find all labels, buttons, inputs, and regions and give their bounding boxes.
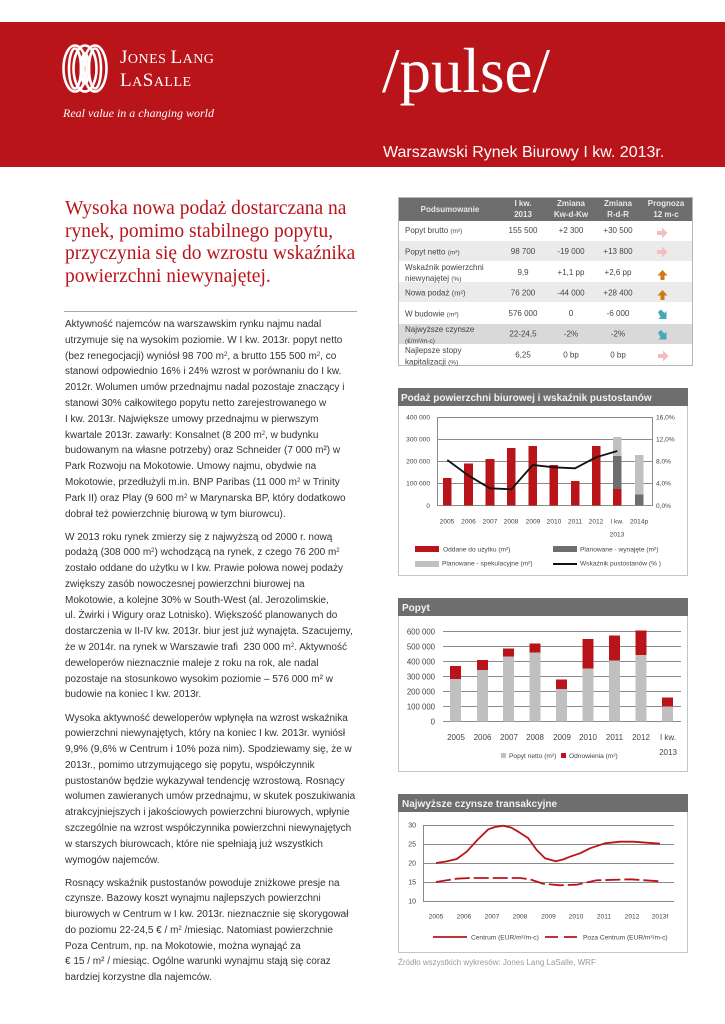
icon: Jones Lang LaSalle logo rings bbox=[62, 44, 108, 93]
x axis labels: I kw. bbox=[660, 733, 676, 742]
x axis labels: 2005 bbox=[447, 733, 465, 742]
tagline: Real value in a changing world bbox=[63, 106, 214, 120]
right axis labels: 8,0% bbox=[656, 458, 671, 466]
main heading: rynek, pomimo stabilnego popytu, bbox=[65, 221, 333, 242]
logo wordmark bbox=[120, 47, 214, 90]
y axis labels: 20 bbox=[408, 860, 416, 868]
x axis labels: 2014p bbox=[630, 518, 648, 526]
chart legend: Wskaźnik pustostanów (% ) bbox=[580, 560, 661, 568]
table values: 76 200 bbox=[511, 288, 536, 298]
report subtitle: Warszawski Rynek Biurowy I kw. 2013r. bbox=[383, 144, 664, 161]
x axis labels: I kw. bbox=[610, 518, 624, 526]
x axis labels: 2013 bbox=[610, 532, 625, 538]
text block: rents: Poza Centrum, np. na Mokotowie, można wynająć za bbox=[65, 941, 301, 952]
text block: vacancy: powierzchni niewynajętych, który na koniec I kw. 2013r. wyniósł bbox=[65, 728, 345, 739]
table header: Podsumowanie bbox=[421, 205, 480, 214]
main heading: powierzchni niewynajętej. bbox=[65, 266, 271, 287]
chart legend: Planowane - wynajęte (m²) bbox=[580, 546, 658, 554]
bar chart: renewals bbox=[450, 630, 673, 706]
x axis labels: 2009 bbox=[541, 914, 556, 920]
text block: new supply: budowie na koniec I kw. 2013r. bbox=[65, 689, 201, 700]
left axis labels bbox=[406, 414, 430, 510]
x axis labels: 2013 bbox=[659, 748, 677, 757]
x axis labels: 2005 bbox=[440, 518, 455, 526]
text block: new supply: W 2013 roku rynek zmierzy się z najwyższą od 2000 r. nową bbox=[65, 532, 332, 542]
text block: new supply: zostało oddane do użytku w I kw. Prawie połowa nowej podaży bbox=[65, 563, 343, 574]
text block: rents: do poziomu 22-24,5 € / m2 /miesiąc. Natomiast powierzchnie bbox=[65, 925, 333, 936]
y axis labels: 200 000 bbox=[407, 688, 436, 696]
text block: tenant activity: kwartale 2013r. zawarły: Konsalnet (8 200 m2, w budynku bbox=[65, 430, 318, 441]
text block: rents bbox=[65, 878, 348, 983]
text block: vacancy: w starszych biurowcach, które nie spełniają już wszystkich bbox=[65, 839, 323, 850]
text block: new supply: zwiększy zasób nowoczesnej powierzchni biurowej na bbox=[65, 579, 305, 590]
table values: 0 bp bbox=[610, 350, 626, 360]
source note: Źródło wszystkich wykresów: Jones Lang LaSalle, WRF bbox=[398, 958, 596, 967]
chart legend bbox=[433, 934, 668, 942]
right axis labels: 12,0% bbox=[656, 436, 675, 444]
text block: tenant activity bbox=[65, 319, 346, 520]
x axis labels: 2010 bbox=[569, 914, 584, 920]
text block: new supply: że w 2014r. na rynek w Warszawie trafi 230 000 m2. Aktywność bbox=[65, 642, 347, 653]
table row labels: niewynajętej (%) bbox=[405, 274, 461, 283]
text block: vacancy: szczególnie na wzrost współczynnika powierzchni niewynajętych bbox=[65, 823, 351, 834]
table row labels: (€/m²/m-c) bbox=[405, 338, 435, 345]
text block: vacancy: wolumen zawieranych umów przednajmu, w skutek poszukiwania bbox=[65, 791, 355, 802]
line chart: vacancy rate bbox=[447, 451, 617, 489]
table values: +30 500 bbox=[603, 226, 633, 235]
text block: new supply: pozostaje na stosunkowo wysokim poziomie – 576 000 m² w bbox=[65, 674, 333, 685]
table values bbox=[509, 226, 633, 360]
left axis labels: 300 000 bbox=[406, 436, 430, 444]
x axis labels: 2012 bbox=[632, 733, 650, 742]
y axis labels: 100 000 bbox=[407, 702, 436, 712]
text block: rents: biurowych w Centrum w I kw. 2013r. nieznacznie się skorygował bbox=[65, 909, 348, 920]
panel: top rents chart bbox=[398, 794, 688, 953]
text block: tenant activity: stanowi 30% całkowitego popytu netto zarejestrowanego w bbox=[65, 398, 326, 409]
x axis labels: 2012 bbox=[625, 914, 640, 920]
text block: rents: € 15 / m² / miesiąc. Ogólne warunki wynajmu stają się coraz bbox=[65, 956, 331, 967]
table header bbox=[421, 199, 685, 219]
table values: 0 bbox=[569, 309, 574, 318]
chart legend: Odnowienia (m²) bbox=[569, 753, 618, 760]
x axis labels: 2009 bbox=[526, 518, 541, 526]
left axis labels: 400 000 bbox=[406, 414, 430, 422]
table values: -2% bbox=[611, 330, 625, 338]
icon: forecast arrows bbox=[657, 228, 668, 362]
chart legend: Poza Centrum (EUR/m²/m-c) bbox=[583, 934, 668, 942]
text block: tenant activity: (bez renegocjacji) wyniósł 98 700 m2, a brutto 155 500 m2, co bbox=[65, 351, 336, 362]
text block: new supply: deweloperów nieznacznie maleje z roku na rok, ale nadal bbox=[65, 658, 318, 669]
table header: I kw. bbox=[514, 199, 532, 208]
table row labels: Popyt netto (m²) bbox=[405, 248, 460, 256]
text block: vacancy: wymogów najemców. bbox=[65, 855, 159, 866]
text block: tenant activity: I kw. 2013r. Największe umowy przednajmu w pierwszym bbox=[65, 414, 318, 425]
table header: Zmiana bbox=[557, 199, 586, 208]
right axis labels: 0,0% bbox=[656, 503, 671, 510]
panel: supply and vacancy chart bbox=[398, 388, 688, 576]
right axis labels: 16,0% bbox=[656, 414, 675, 422]
left axis labels: 200 000 bbox=[406, 458, 430, 466]
x axis labels bbox=[447, 733, 677, 757]
table values: +2,6 pp bbox=[605, 268, 632, 277]
x axis labels: 2011 bbox=[568, 518, 582, 526]
x axis labels bbox=[429, 914, 668, 920]
left axis labels: 100 000 bbox=[406, 480, 430, 488]
table row labels: Nowa podaż (m²) bbox=[405, 288, 466, 298]
y axis labels: 10 bbox=[408, 898, 416, 906]
y axis labels: 0 bbox=[431, 718, 436, 726]
table values: 576 000 bbox=[509, 309, 538, 318]
text block: vacancy: pustostanów będzie wykazywał tendencję wzrostową. Rosnący bbox=[65, 776, 345, 787]
x axis labels: 2010 bbox=[547, 518, 562, 526]
text block: tenant activity: utrzymuje się na wysokim poziomie. W I kw. 2013r. popyt netto bbox=[65, 335, 342, 346]
y axis labels: 15 bbox=[408, 880, 416, 886]
x axis labels: 2011 bbox=[606, 733, 624, 742]
text block: rents: bardziej korzystne dla najemców. bbox=[65, 972, 212, 983]
table values: 0 bp bbox=[563, 350, 579, 360]
chart legend bbox=[415, 546, 661, 568]
y axis labels: 25 bbox=[408, 842, 416, 848]
line chart: outside-centre rents bbox=[436, 878, 660, 885]
table row labels: Najwyższe czynsze bbox=[405, 325, 475, 334]
y axis labels: 600 000 bbox=[407, 628, 436, 636]
table values: -2% bbox=[564, 330, 578, 338]
x axis labels: 2012 bbox=[589, 518, 604, 526]
x axis labels: 2007 bbox=[485, 914, 500, 920]
table row labels bbox=[405, 226, 484, 366]
x axis labels bbox=[440, 518, 648, 538]
chart legend bbox=[501, 753, 618, 760]
table header: Prognoza bbox=[648, 199, 685, 208]
table values: +2 300 bbox=[559, 226, 584, 235]
table values: 6,25 bbox=[515, 350, 531, 360]
x axis labels: 2008 bbox=[504, 518, 519, 526]
table row labels: Wskaźnik powierzchni bbox=[405, 263, 484, 272]
text block: vacancy: Wysoka aktywność deweloperów wpłynęła na wzrost wskaźnika bbox=[65, 712, 348, 724]
text block: rents: Rosnący wskaźnik pustostanów powoduje zniżkowe presje na bbox=[65, 878, 340, 888]
logo wordmark: LASALLE bbox=[120, 70, 192, 90]
y axis labels bbox=[407, 628, 436, 726]
y axis labels bbox=[408, 822, 416, 906]
text block: tenant activity: Park II) oraz Play (9 600 m2 w Marynarska BP, który dodatkowo bbox=[65, 493, 346, 504]
chart legend: Planowane - spekulacyjne (m²) bbox=[442, 560, 533, 568]
text block: tenant activity: dobrał też powierzchnię biurową w tym biurowcu). bbox=[65, 509, 286, 520]
text block: tenant activity: 2012r. Wolumen umów przednajmu nadal pozostaje znaczący i bbox=[65, 382, 344, 393]
table header: 2013 bbox=[514, 210, 532, 219]
left axis labels: 0 bbox=[426, 503, 430, 510]
pulse title: /pulse/ bbox=[382, 36, 550, 106]
logo wordmark: JONES LANG bbox=[120, 47, 214, 68]
table header: 12 m-c bbox=[653, 210, 679, 219]
x axis labels: 2008 bbox=[526, 733, 544, 742]
text block: vacancy: 9,9% (9,6% w Centrum i 10% poza nim). Spodziewamy się, że w bbox=[65, 744, 352, 755]
text block: new supply: podażą (308 000 m2) wchodzącą na rynek, z czego 76 200 m2 bbox=[65, 547, 340, 558]
table row labels: Najlepsze stopy bbox=[405, 346, 461, 355]
x axis labels: 2006 bbox=[457, 914, 472, 920]
table values: -19 000 bbox=[557, 247, 585, 256]
table values: 155 500 bbox=[509, 226, 538, 235]
table row labels: W budowie (m²) bbox=[405, 310, 459, 318]
text block: new supply: ul. Żwirki i Wigury oraz Lotnisko). Większość planowanych do bbox=[65, 610, 337, 621]
y axis labels: 30 bbox=[408, 822, 416, 830]
x axis labels: 2009 bbox=[553, 733, 571, 742]
text block: tenant activity: Aktywność najemców na warszawskim rynku najmu nadal bbox=[65, 319, 321, 330]
y axis labels: 300 000 bbox=[407, 672, 436, 682]
line chart: centre rents bbox=[436, 826, 660, 863]
main heading bbox=[65, 198, 355, 287]
panel: demand chart bbox=[398, 598, 688, 772]
table values: 22-24,5 bbox=[509, 330, 537, 338]
main heading: Wysoka nowa podaż dostarczana na bbox=[65, 198, 346, 219]
chart heading: Popyt bbox=[402, 603, 430, 614]
table header: R-d-R bbox=[607, 210, 629, 219]
x axis labels: 2007 bbox=[483, 518, 498, 526]
text block: new supply: Mokotowie, a kolejne 30% w South-West (al. Jerozolimskie, bbox=[65, 595, 329, 606]
table values: +1,1 pp bbox=[558, 268, 585, 277]
text block: tenant activity: Park Rozwoju na Mokotowie. Umowy najmu, obydwie na bbox=[65, 461, 316, 472]
x axis labels: 2011 bbox=[597, 914, 611, 920]
text block: vacancy: 2013r., pomimo utrzymującego się popytu, współczynnik bbox=[65, 760, 315, 771]
chart heading: Podaż powierzchni biurowej i wskaźnik pustostanów bbox=[401, 393, 652, 404]
x axis labels: 2013f bbox=[652, 914, 668, 920]
main heading: przyczynia się do wzrostu wskaźnika bbox=[65, 243, 355, 264]
table header: Zmiana bbox=[604, 199, 633, 208]
x axis labels: 2008 bbox=[513, 914, 528, 920]
chart legend: Centrum (EUR/m²/m-c) bbox=[471, 934, 539, 942]
text block: tenant activity: stanowi odpowiednio 16% i 24% wzrost w porównaniu do I kw. bbox=[65, 366, 341, 377]
chart heading: Najwyższe czynsze transakcyjne bbox=[402, 799, 558, 810]
header band bbox=[0, 22, 725, 167]
table row labels: kapitalizacji (%) bbox=[405, 358, 458, 366]
table row labels: Popyt brutto (m²) bbox=[405, 226, 462, 235]
x axis labels: 2010 bbox=[579, 733, 597, 742]
chart legend: Oddane do użytku (m²) bbox=[443, 546, 510, 554]
text block: vacancy bbox=[65, 712, 356, 866]
x axis labels: 2005 bbox=[429, 914, 444, 920]
table header: Kw-d-Kw bbox=[554, 210, 589, 219]
x axis labels: 2007 bbox=[500, 733, 518, 742]
text block: new supply bbox=[65, 532, 353, 700]
panel: summary table bbox=[398, 197, 693, 366]
x axis labels: 2006 bbox=[474, 733, 492, 742]
table values: 9,9 bbox=[517, 268, 529, 277]
table values: +28 400 bbox=[603, 288, 633, 298]
y axis labels: 500 000 bbox=[407, 642, 436, 652]
bar chart: net demand bbox=[450, 652, 673, 722]
right axis labels bbox=[656, 414, 675, 510]
table values: 98 700 bbox=[511, 247, 536, 256]
table values: +13 800 bbox=[603, 247, 633, 256]
chart legend: Popyt netto (m²) bbox=[509, 753, 556, 760]
y axis labels: 400 000 bbox=[407, 658, 436, 666]
text block: new supply: dostarczenia w II-IV kw. 2013r. biur jest już wynajęta. Szacujemy, bbox=[65, 626, 353, 637]
text block: rents: czynsze. Bazowy koszt wynajmu najlepszych powierzchni bbox=[65, 893, 321, 904]
table values: -44 000 bbox=[557, 288, 585, 298]
bar chart: supply bbox=[443, 437, 644, 506]
right axis labels: 4,0% bbox=[656, 480, 671, 488]
text block: tenant activity: Mokotowie, przedłużyli m.in. BNP Paribas (11 000 m2 w Trinity bbox=[65, 477, 340, 488]
text block: vacancy: atrakcyjniejszych i jakościowych powierzchni biurowych, wpłynie bbox=[65, 807, 350, 818]
x axis labels: 2006 bbox=[461, 518, 476, 526]
table values: -6 000 bbox=[607, 309, 630, 318]
text block: tenant activity: budowanym na własne potrzeby) oraz Schneider (7 000 m²) w bbox=[65, 445, 340, 456]
